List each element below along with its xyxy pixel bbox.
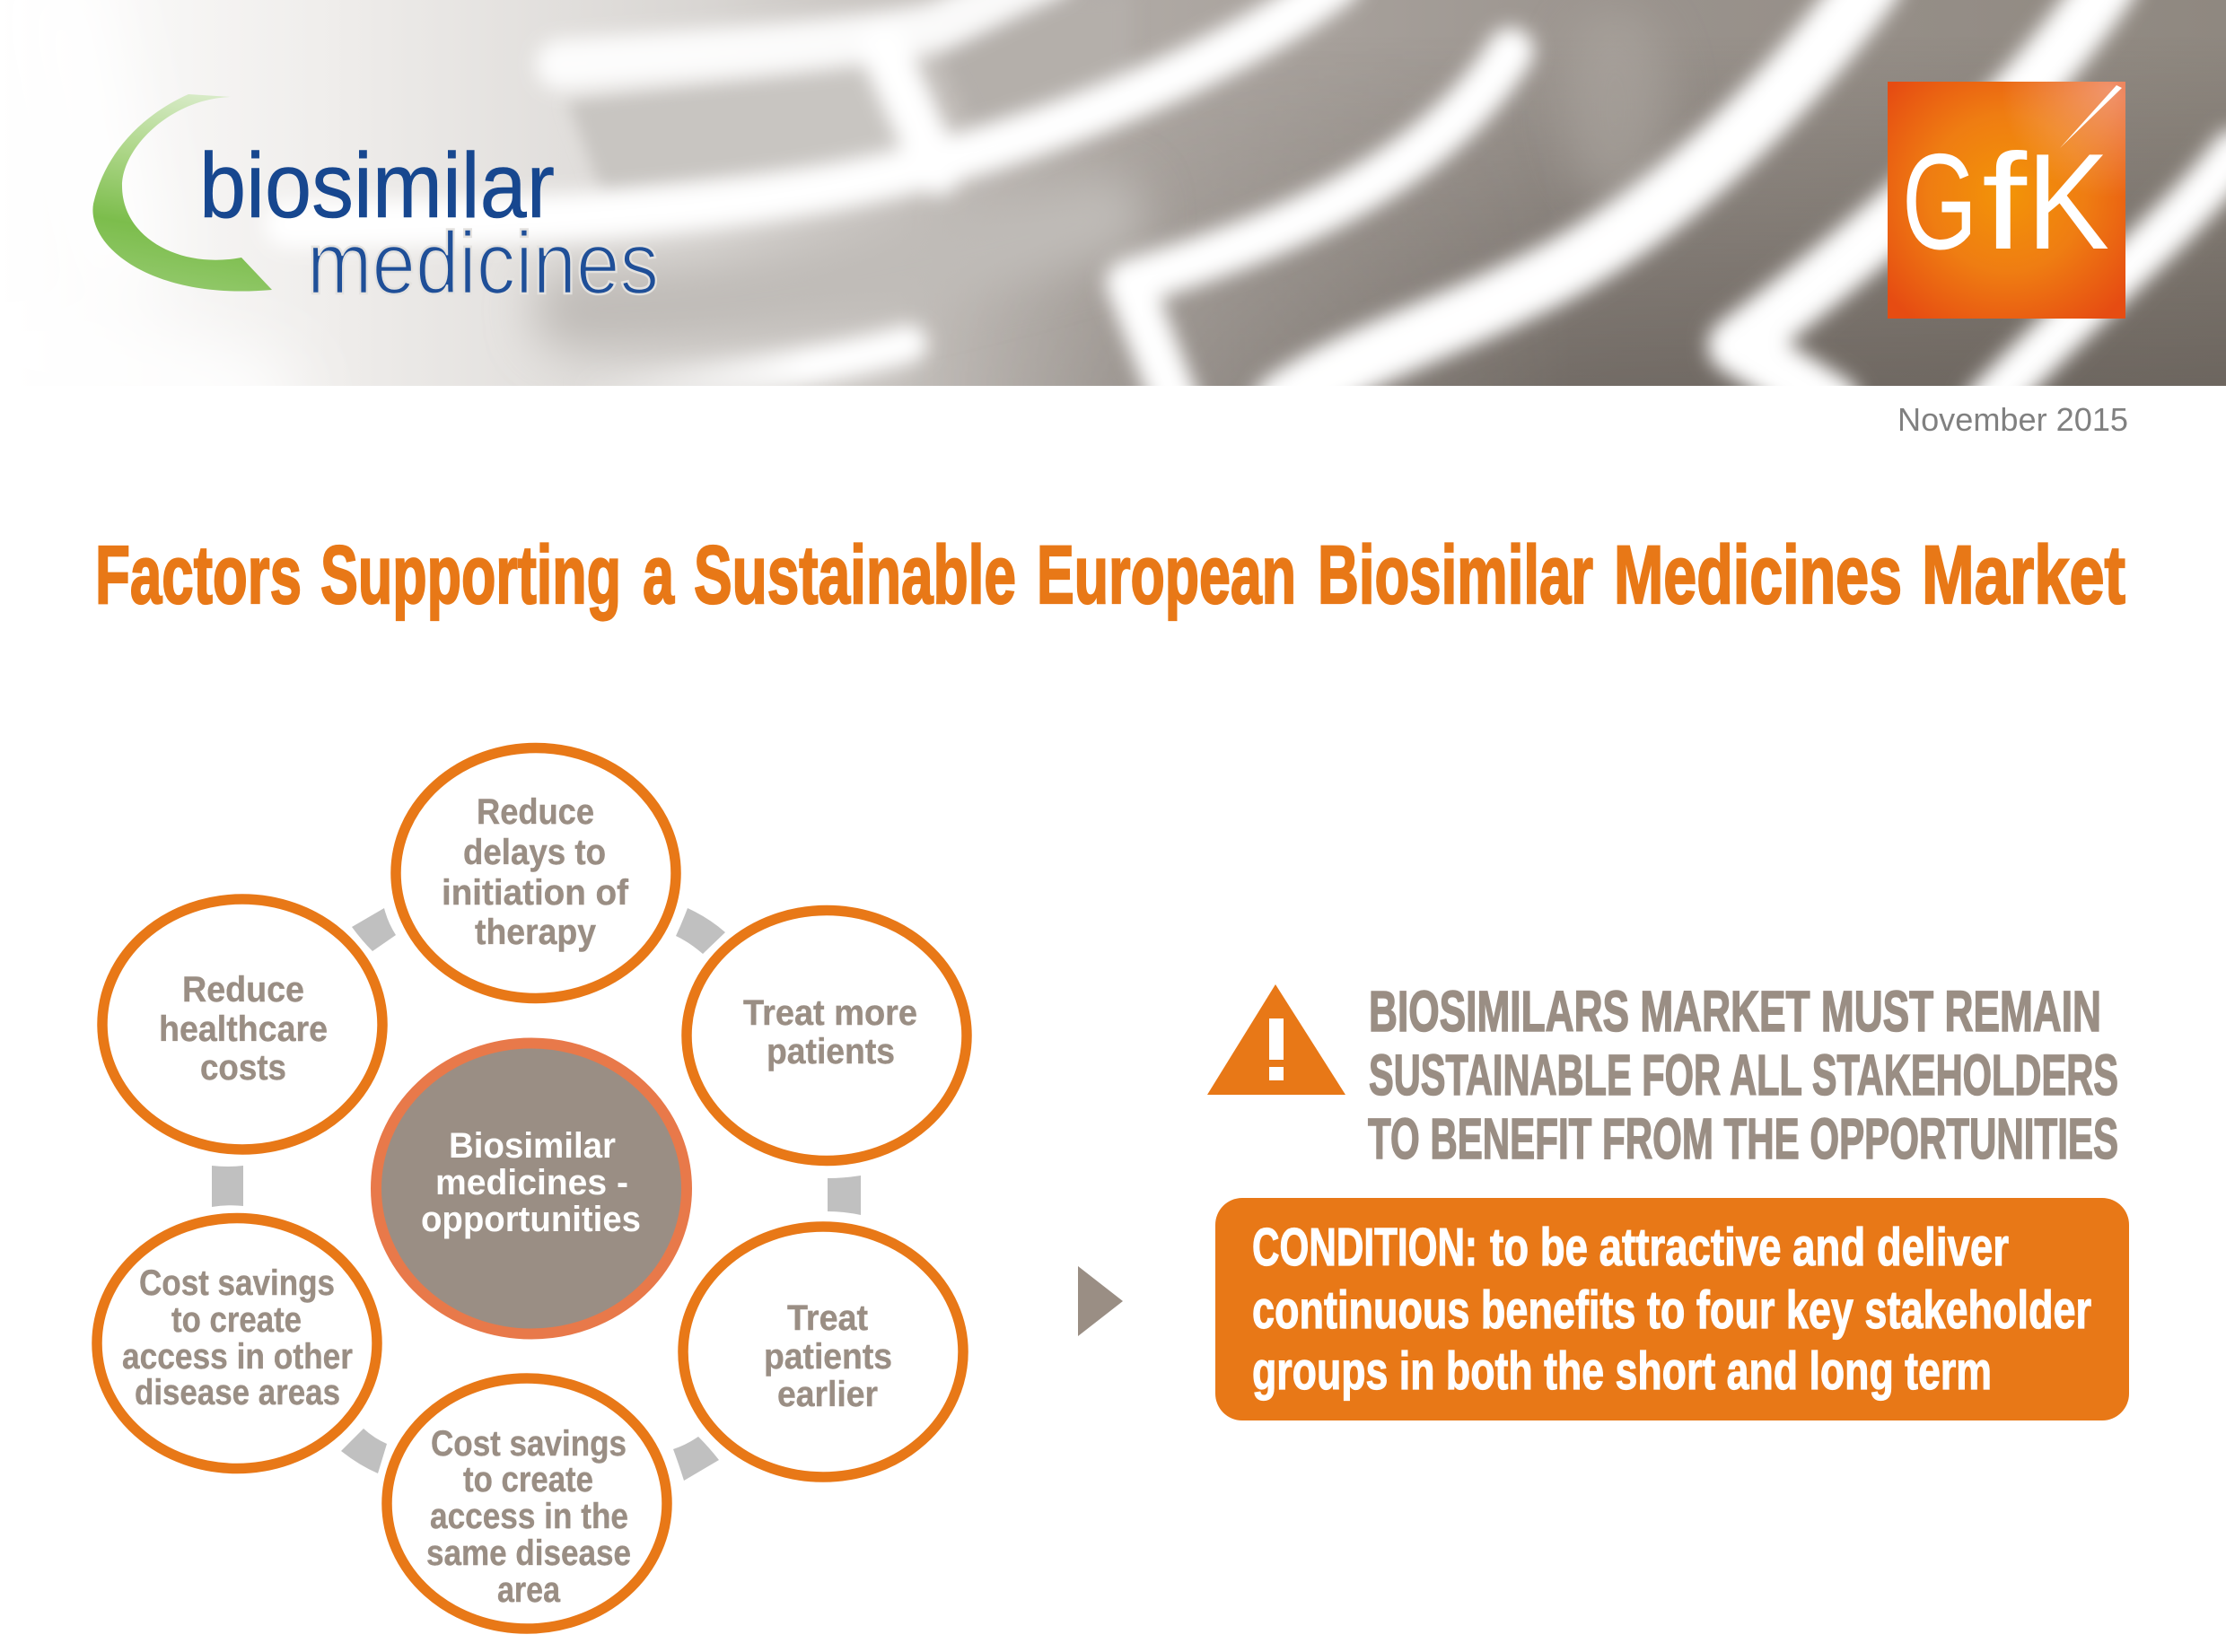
- circle: treat more patients: [687, 910, 967, 1161]
- logo crescent: [92, 94, 272, 292]
- logo wordmark: f: [1982, 126, 2028, 278]
- logo: biosimilar medicines: [92, 94, 659, 312]
- title: Factors: [95, 529, 302, 621]
- callout: condition: groups in both the short and long term: [1252, 1342, 1992, 1401]
- callout: condition: CONDITION:: [1252, 1218, 1477, 1277]
- logo wordmark: G: [1902, 126, 1977, 278]
- circle: cost savings same disease area: area: [497, 1570, 561, 1610]
- circle: cost savings same disease area: Cost savings: [431, 1424, 627, 1464]
- centre circle: biosimilar medicines opportunities: [376, 1043, 687, 1333]
- centre circle: biosimilar medicines opportunities: opportunities: [421, 1200, 641, 1239]
- circle: cost savings same disease area: [387, 1378, 667, 1629]
- callout: condition: [1215, 1198, 2129, 1420]
- callout: condition: to be attractive and deliver: [1490, 1218, 2009, 1277]
- diagram: opportunities cycle: [97, 748, 967, 1629]
- logo glint: [2060, 85, 2122, 148]
- title: [95, 529, 2125, 621]
- title: Medicines: [1614, 529, 1902, 621]
- connectors between circles: [212, 908, 861, 1481]
- circle: reduce delays: initiation of: [442, 873, 629, 913]
- title: European: [1037, 529, 1296, 621]
- circle: cost savings other disease areas: to create: [171, 1300, 302, 1340]
- circle: reduce delays: [396, 748, 676, 998]
- circle: reduce delays: therapy: [475, 913, 597, 952]
- circle: cost savings same disease area: access in the: [430, 1497, 628, 1536]
- circle: cost savings other disease areas: disease areas: [135, 1373, 340, 1412]
- logo: GfK: [1888, 82, 2125, 319]
- circle: cost savings same disease area: to create: [463, 1460, 593, 1499]
- centre circle: biosimilar medicines opportunities: Biosimilar: [449, 1126, 616, 1166]
- circle: cost savings other disease areas: access in other: [122, 1337, 353, 1377]
- circle: reduce healthcare costs: Reduce: [182, 970, 304, 1010]
- logo tile: [1888, 82, 2125, 319]
- logo word: medicines: medicines: [307, 214, 659, 312]
- centre circle: biosimilar medicines opportunities: medicines -: [435, 1163, 628, 1202]
- circle: treat patients earlier: patients: [764, 1337, 892, 1377]
- circle: cost savings same disease area: same disease: [426, 1534, 631, 1573]
- logo wordmark: [1902, 126, 2109, 278]
- circle: treat patients earlier: [683, 1227, 963, 1477]
- date: November 2015: [1897, 401, 2128, 438]
- circle: reduce delays: Reduce: [477, 792, 594, 832]
- circle: treat more patients: patients: [767, 1032, 895, 1071]
- circle: reduce healthcare costs: costs: [200, 1048, 286, 1088]
- header banner: [152, 0, 2226, 386]
- title: Supporting: [320, 529, 621, 621]
- title: a: [643, 529, 675, 621]
- logo word: biosimilar: biosimilar: [199, 134, 555, 237]
- logo gloss: [1888, 82, 2125, 319]
- circle: cost savings other disease areas: Cost savings: [139, 1263, 335, 1303]
- title: Market: [1922, 529, 2125, 621]
- circle: reduce delays: delays to: [463, 833, 606, 872]
- logo wordmark: K: [2027, 126, 2109, 278]
- arrow: [1078, 1266, 1123, 1336]
- circle: treat more patients: Treat more: [743, 993, 917, 1033]
- circle: treat patients earlier: Treat: [787, 1298, 868, 1338]
- circle: reduce healthcare costs: [102, 899, 382, 1149]
- circle: cost savings other disease areas: [97, 1219, 377, 1468]
- message: market must remain sustainable: [1368, 979, 2118, 1171]
- circle: treat patients earlier: earlier: [777, 1375, 878, 1414]
- icon: warning triangle: [1207, 984, 1345, 1095]
- circle: reduce healthcare costs: healthcare: [159, 1010, 328, 1049]
- title: Biosimilar: [1318, 529, 1593, 621]
- title: Sustainable: [694, 529, 1016, 621]
